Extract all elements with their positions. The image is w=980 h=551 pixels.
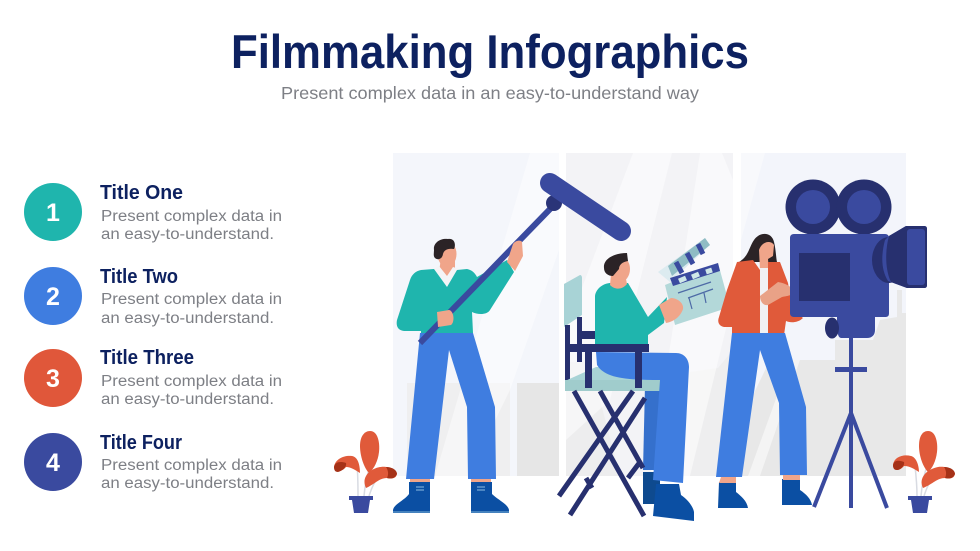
item 3 text [100,347,282,408]
seat [565,367,661,391]
director chair and seated person [559,238,730,521]
item 4 text: Title Four [100,432,182,454]
boom microphone [546,183,621,231]
near boot [653,484,694,521]
number badge 2 [24,267,82,325]
backdrop: studio windows and skyline [393,153,906,476]
title: Filmmaking Infographics [231,25,749,78]
number badge 4 [24,433,82,491]
item 1 text: an easy-to-understand. [101,226,274,243]
chair back posts [565,317,647,385]
film reels [786,180,892,234]
lens hood [882,226,927,288]
item 2 text: Present complex data in [101,291,282,308]
item 4 text [100,432,282,492]
lens back [872,237,906,283]
subtitle: Present complex data in an easy-to-understand way [281,83,699,103]
item 2 text [100,266,282,327]
collar [433,266,459,287]
trousers [406,333,496,479]
plant right [893,431,955,513]
neck and head [439,258,455,284]
number badge 2: 2 [46,283,60,311]
item 4 text: an easy-to-understand. [101,475,274,492]
number badge 3 [24,349,82,407]
thigh and shin [596,352,689,483]
far leg [643,385,672,470]
film camera on tripod [786,180,927,508]
number badge 1: 1 [46,199,60,227]
shirt [759,268,769,334]
clapperboard [658,238,730,325]
torso [595,283,667,350]
ankles [719,475,800,483]
sweater [397,260,514,333]
item 2 text: Title Two [100,266,178,288]
person: camera operator [716,234,812,508]
hair [604,253,628,276]
list item 4 [24,432,282,492]
trousers [716,333,807,477]
chair crossed legs [559,391,645,516]
hair [434,239,455,259]
number badge 3: 3 [46,365,60,393]
viewfinder [799,253,850,301]
chair back [564,275,582,327]
forearm and hand [760,282,793,305]
hair [739,234,777,262]
item 3 text: an easy-to-understand. [101,391,274,408]
item 1 text: Title One [100,182,183,204]
tripod [814,335,887,508]
item 1 text [100,182,282,243]
far boot [643,472,660,504]
item 3 text: Present complex data in [101,373,282,390]
boots [718,479,812,508]
hand [659,298,683,323]
list item 1 [24,182,282,243]
list item 2 [24,266,282,327]
number badge 1 [24,183,82,241]
item 2 text: an easy-to-understand. [101,310,274,327]
jacket [718,260,760,333]
chair front frame [565,344,649,388]
camera body [790,234,889,338]
right hand and wrist [507,241,523,271]
person: boom operator [393,183,621,513]
boom pole [420,206,553,343]
boots [393,482,509,513]
list item 3 [24,347,282,408]
skin at ankles [410,476,491,482]
item 4 text: Present complex data in [101,457,282,474]
number badge 4: 4 [46,449,60,477]
camera knob [825,318,839,338]
item 3 text: Title Three [100,347,194,369]
item 1 text: Present complex data in [101,208,282,225]
face and neck [759,242,774,272]
plant left [334,431,397,513]
neck and head [610,274,627,289]
left hand [437,310,453,327]
